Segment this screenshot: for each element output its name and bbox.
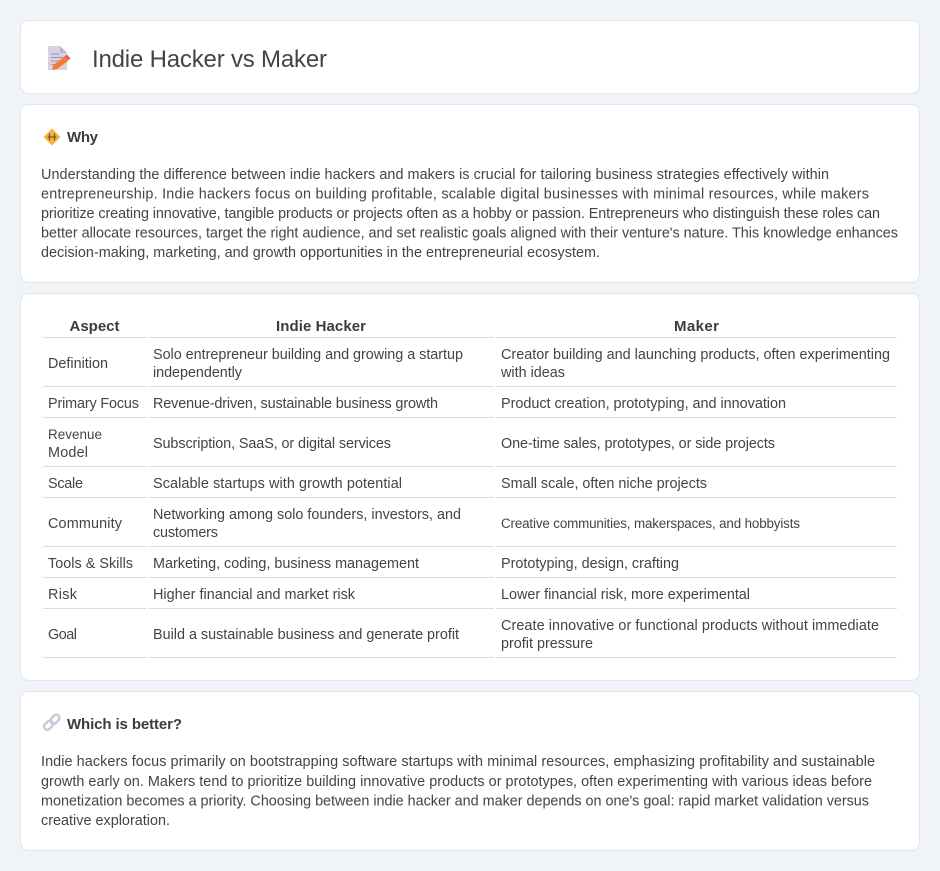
- text block: which is better paragraph: [41, 754, 875, 829]
- row: revenue model: Revenue: [48, 427, 102, 442]
- row: scale: Scalable startups with growth potential: [153, 476, 402, 492]
- row: scale: Small scale, often niche projects: [501, 476, 707, 492]
- row: risk: Lower financial risk, more experimental: [501, 587, 750, 603]
- row: tools and skills: [48, 556, 679, 572]
- row: revenue model: One-time sales, prototypes, or side projects: [501, 436, 775, 452]
- heading: why: Why: [67, 129, 99, 146]
- text block: which is better paragraph: growth early on. Makers tend to prioritize building innovative products or prototypes, often experimenting with various ideas before: [41, 774, 872, 790]
- row: risk: Higher financial and market risk: [153, 587, 356, 603]
- row: primary focus: Product creation, prototyping, and innovation: [501, 396, 786, 412]
- icon: link: [43, 713, 61, 731]
- row: community: customers: [153, 525, 218, 541]
- table header row: [70, 318, 719, 335]
- table header row: Indie Hacker: [276, 318, 366, 335]
- row: goal: Create innovative or functional products without immediate: [501, 618, 879, 634]
- panel: which is better: [20, 692, 920, 850]
- row: goal: Goal: [48, 627, 77, 643]
- row: revenue model: Model: [48, 445, 88, 461]
- panel: title header: [20, 20, 920, 94]
- row: revenue model: Subscription, SaaS, or digital services: [153, 436, 391, 452]
- row: community: Networking among solo founders, investors, and: [153, 507, 461, 523]
- text block: why paragraph: better allocate resources, target the right audience, and set realistic goals aligned with their venture's nature. This knowledge enhances: [41, 226, 898, 242]
- row: tools and skills: Tools & Skills: [48, 556, 133, 572]
- row: goal: [48, 618, 879, 652]
- row: revenue model: [48, 427, 775, 461]
- row: scale: [48, 476, 707, 492]
- text block: which is better paragraph: monetization becomes a priority. Choosing between indie hacker and maker depends on one's goal: rapid market validation versus: [41, 794, 869, 810]
- row: risk: [48, 587, 750, 603]
- row: community: Creative communities, makerspaces, and hobbyists: [501, 516, 800, 531]
- row: definition: Solo entrepreneur building and growing a startup: [153, 347, 463, 363]
- text block: why paragraph: prioritize creating innovative, tangible products or projects often as a hobby or passion. Entrepreneurs who distinguish these roles can: [41, 206, 880, 222]
- panel: why: [20, 104, 920, 282]
- table header row: Maker: [674, 318, 719, 335]
- row: primary focus: Revenue-driven, sustainable business growth: [153, 396, 438, 412]
- icon: memo and pencil: [48, 46, 70, 70]
- row: definition: [48, 347, 890, 381]
- text block: why paragraph: [41, 167, 898, 261]
- row: tools and skills: Marketing, coding, business management: [153, 556, 419, 572]
- text block: which is better paragraph: creative exploration.: [41, 813, 170, 829]
- panel: comparison table: [20, 294, 920, 680]
- row: risk: Risk: [48, 587, 78, 603]
- row: goal: profit pressure: [501, 636, 593, 652]
- text block: which is better paragraph: Indie hackers focus primarily on bootstrapping software startups with minimal resources, emphasizing profitability and sustainable: [41, 754, 875, 770]
- row: definition: Definition: [48, 356, 108, 372]
- table header row: Aspect: [70, 318, 120, 335]
- row: scale: Scale: [48, 476, 83, 492]
- row: community: Community: [48, 516, 123, 532]
- heading: which is better: Which is better?: [67, 716, 182, 733]
- row: definition: with ideas: [500, 365, 565, 381]
- row: community: [48, 507, 800, 541]
- title: Indie Hacker vs Maker: [92, 46, 327, 73]
- row: primary focus: [48, 396, 786, 412]
- icon: diamond warning sign: [44, 128, 60, 146]
- row: goal: Build a sustainable business and generate profit: [153, 627, 459, 643]
- row: tools and skills: Prototyping, design, crafting: [501, 556, 679, 572]
- text block: why paragraph: entrepreneurship. Indie hackers focus on building profitable, scalable digital businesses with minimal resources, while makers: [41, 186, 869, 202]
- row: definition: Creator building and launching products, often experimenting: [501, 347, 890, 363]
- text block: why paragraph: decision-making, marketing, and growth opportunities in the entrepreneurial ecosystem.: [41, 245, 600, 261]
- row: definition: independently: [153, 365, 243, 381]
- row: primary focus: Primary Focus: [48, 396, 139, 412]
- text block: why paragraph: Understanding the difference between indie hackers and makers is crucial for tailoring business strategies effectively within: [41, 167, 829, 183]
